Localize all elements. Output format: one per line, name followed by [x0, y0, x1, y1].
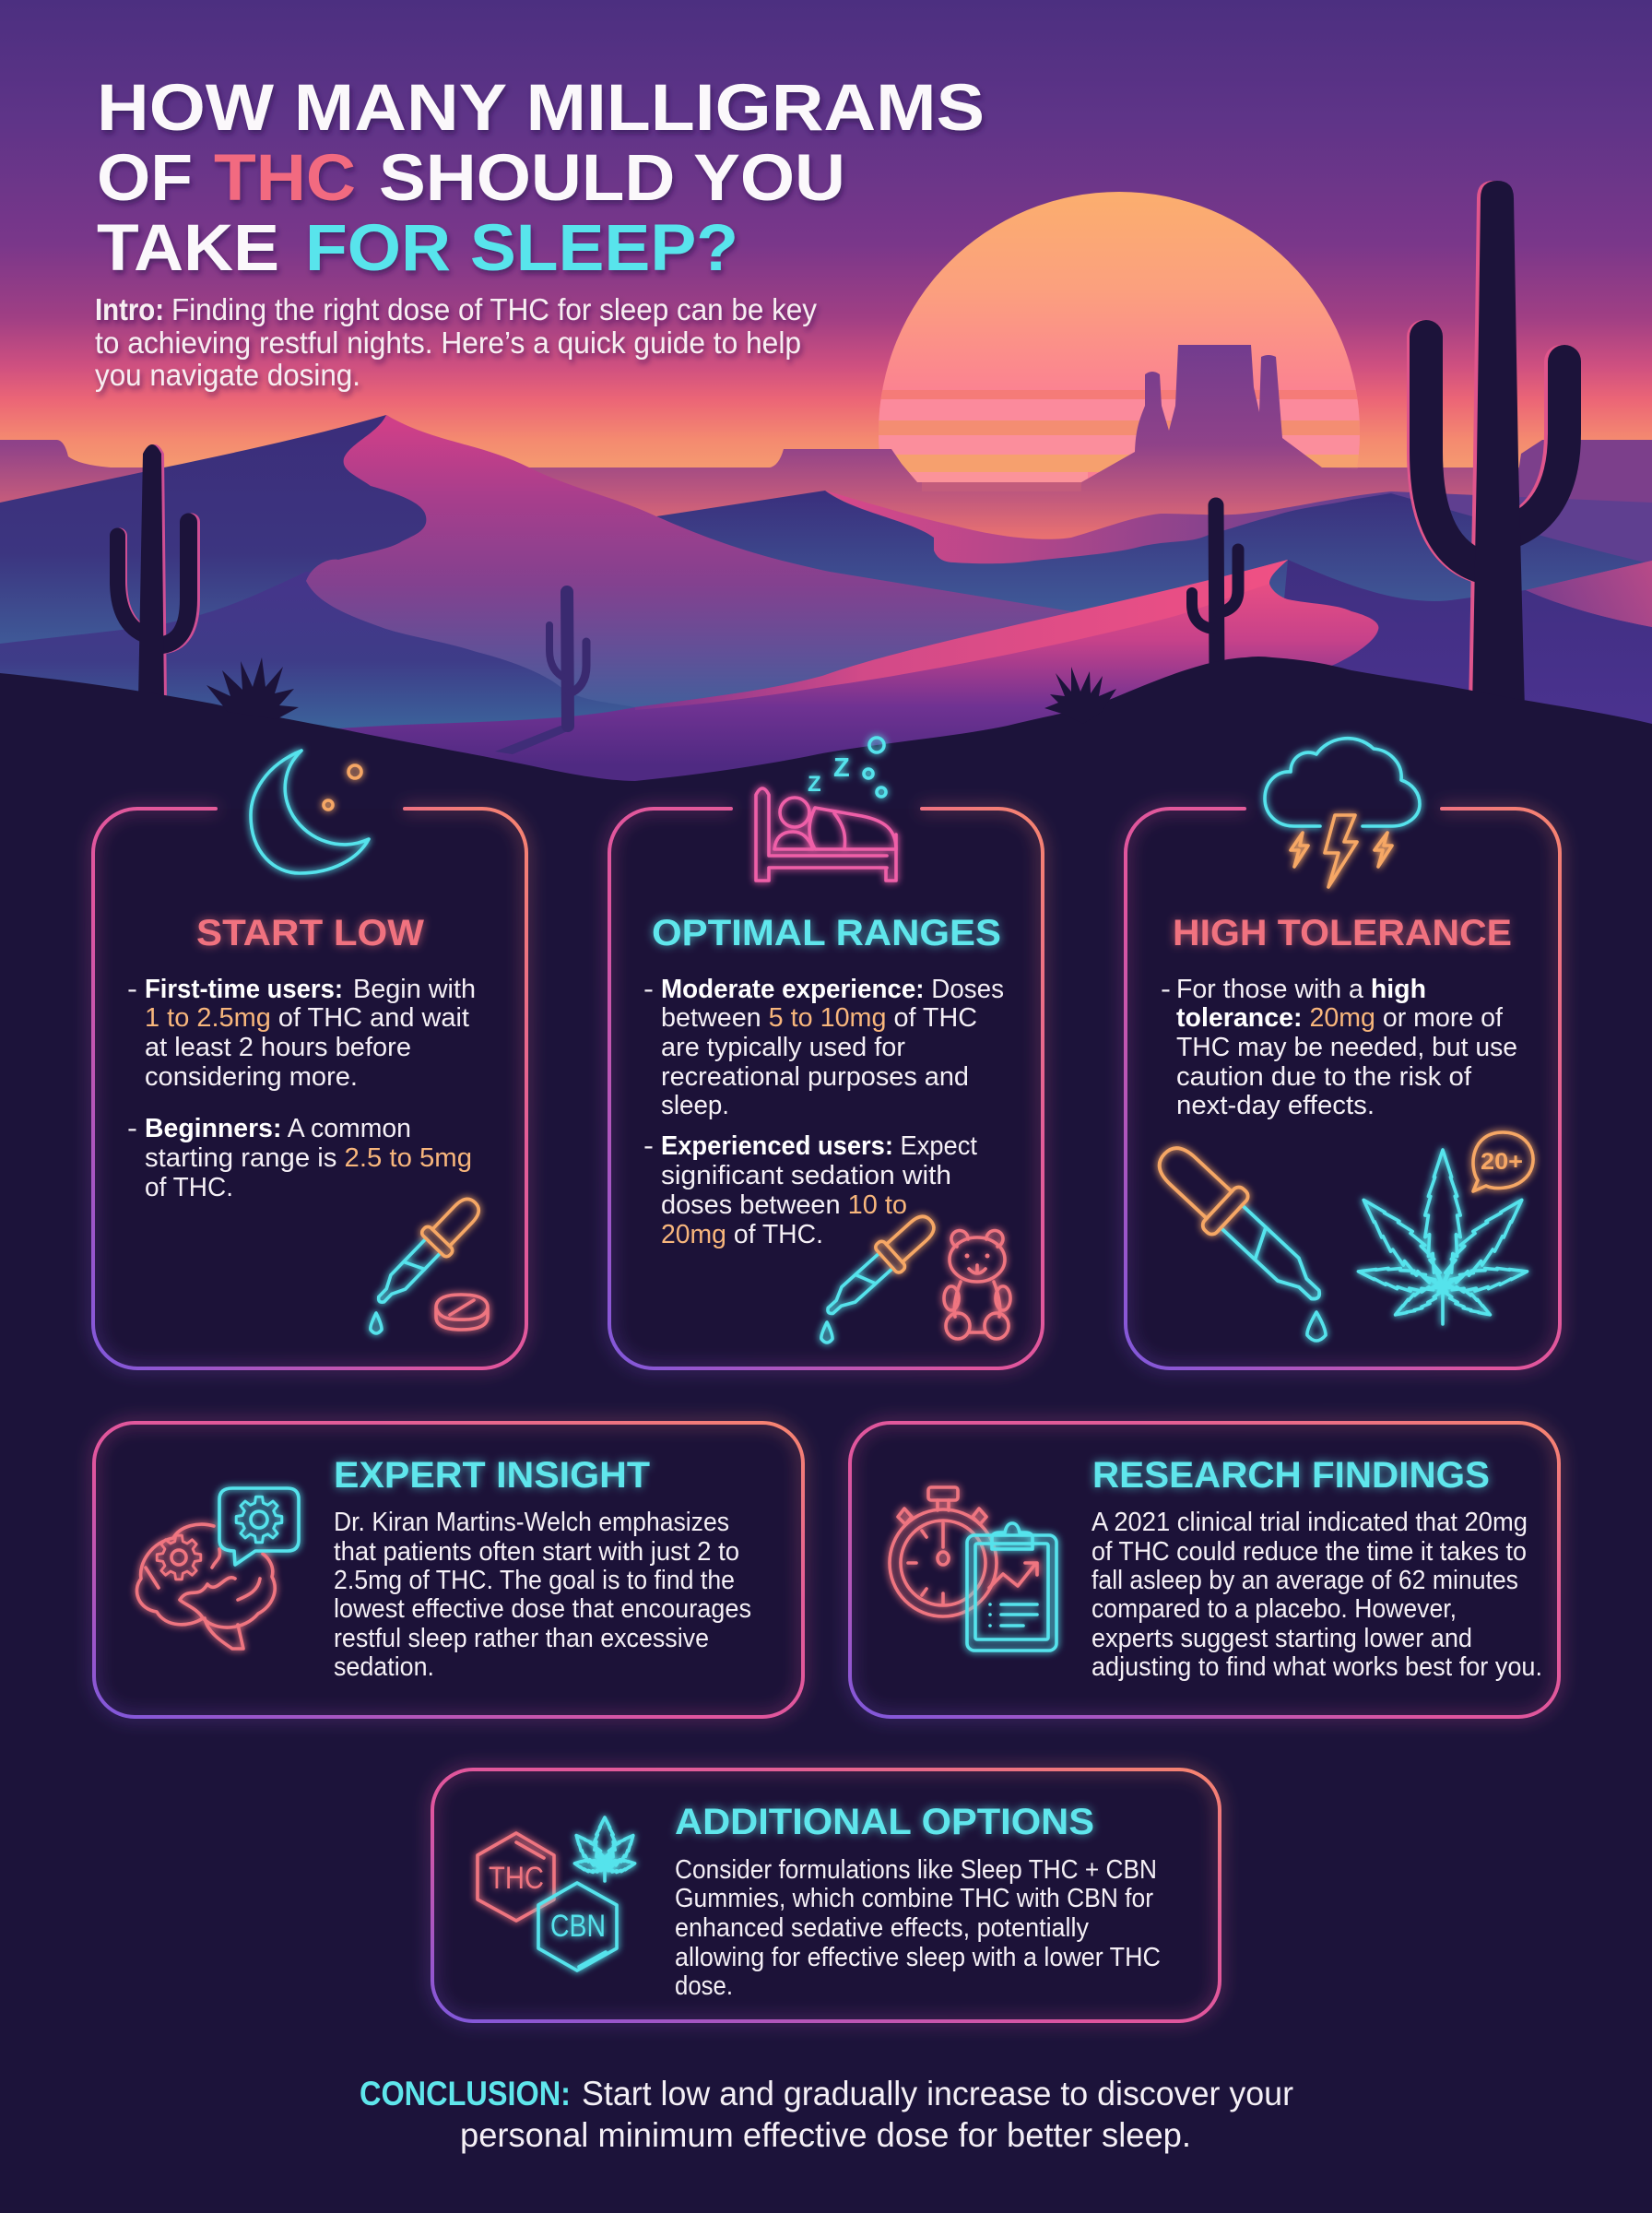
body text: For those with a high — [1176, 975, 1426, 1004]
body text: at least 2 hours before — [145, 1033, 411, 1062]
body text: that patients often start with just 2 to — [334, 1537, 739, 1567]
panel: research findings — [850, 1423, 1559, 1717]
heading: HIGH TOLERANCE — [1173, 913, 1512, 953]
conclusion — [360, 2075, 1293, 2154]
body text — [1092, 1508, 1542, 1682]
intro text: to achieving restful nights. Here’s a quick guide to help — [95, 325, 801, 360]
body text: lowest effective dose that encourages — [334, 1594, 751, 1624]
icon: crescent moon and stars — [251, 751, 369, 873]
card border — [850, 1423, 1559, 1717]
mesa: monument butte — [1081, 345, 1383, 544]
card border — [432, 1769, 1220, 2021]
body text: caution due to the risk of — [1176, 1062, 1472, 1092]
body text: Begin with — [353, 975, 476, 1004]
back dune: magenta wedge — [825, 491, 1652, 590]
body text: Moderate experience: Doses — [661, 975, 1004, 1004]
body text: of THC could reduce the time it takes to — [1092, 1537, 1527, 1567]
body text: starting range is 2.5 to 5mg — [145, 1143, 472, 1173]
body text — [1161, 975, 1517, 1120]
icon: person sleeping in bed: Z — [808, 772, 821, 797]
body text: enhanced sedative effects, potentially — [675, 1913, 1089, 1943]
heading: OPTIMAL RANGES — [652, 913, 1001, 953]
body text: First-time users: — [145, 975, 343, 1004]
body text: doses between 10 to — [661, 1190, 907, 1220]
icon: small cannabis leaf — [571, 1817, 639, 1881]
body text: restful sleep rather than excessive — [334, 1624, 709, 1653]
sun with stripes — [876, 189, 1364, 491]
body text: - — [127, 975, 137, 1004]
card border — [93, 809, 526, 1368]
icon: person sleeping in bed: Z — [833, 753, 850, 783]
cactus: small middle — [495, 592, 586, 754]
body text — [334, 1508, 751, 1682]
icon: clipboard chart — [967, 1523, 1056, 1651]
body text: compared to a placebo. However, — [1092, 1594, 1457, 1624]
right dark dune — [1272, 560, 1652, 728]
body text: - — [643, 975, 654, 1004]
body text — [127, 975, 476, 1202]
icon: brain with gears — [136, 1488, 299, 1649]
icon: THC hexagon: THC — [489, 1861, 544, 1896]
intro text: Intro: — [95, 292, 164, 326]
icon: 20+ speech bubble — [1473, 1132, 1533, 1191]
title — [97, 72, 985, 285]
far right pink dune — [1438, 561, 1652, 636]
icon: CBN hexagon — [538, 1883, 617, 1970]
agave left — [206, 657, 299, 719]
panel: high tolerance — [1126, 739, 1560, 1368]
heading: START LOW — [196, 913, 424, 953]
body text: sleep. — [661, 1091, 729, 1120]
body text: THC may be needed, but use — [1176, 1033, 1517, 1062]
heading: RESEARCH FINDINGS — [1092, 1455, 1490, 1496]
pink dune ridge highlight — [635, 560, 1288, 710]
body text: considering more. — [145, 1062, 358, 1092]
panel: expert insight — [94, 1423, 803, 1717]
body text — [643, 975, 1004, 1249]
icon: storm cloud with bolts — [1265, 739, 1420, 887]
big dune: lit face — [306, 415, 1071, 728]
horizon band — [0, 467, 1652, 744]
title: FOR SLEEP? — [305, 212, 738, 285]
intro text: Finding the right dose of THC for sleep can be key — [171, 292, 817, 326]
body text: - — [643, 1131, 654, 1161]
body text: sedation. — [334, 1652, 434, 1682]
sky background — [0, 0, 1652, 553]
body text: - — [1161, 975, 1171, 1004]
mesa: far right — [1512, 440, 1652, 516]
title: HOW MANY MILLIGRAMS — [97, 72, 985, 145]
body text: of THC. — [145, 1173, 233, 1202]
icon: cannabis leaf — [1352, 1150, 1533, 1324]
panel: optimal ranges — [609, 738, 1043, 1368]
body text: 1 to 2.5mg of THC and wait — [145, 1003, 469, 1033]
panel: additional options — [432, 1769, 1220, 2021]
body text: between 5 to 10mg of THC — [661, 1003, 977, 1033]
card border — [609, 809, 1043, 1368]
ground silhouette — [0, 657, 1652, 2213]
conclusion: Start low and gradually increase to discover your — [582, 2075, 1293, 2112]
cactus: left — [118, 444, 192, 701]
body text: adjusting to find what works best for you. — [1092, 1652, 1542, 1682]
body text: experts suggest starting lower and — [1092, 1624, 1472, 1653]
back dune: blue ridge — [656, 491, 1646, 664]
icon: large dropper — [1145, 1133, 1338, 1341]
body text: significant sedation with — [661, 1161, 951, 1190]
body text: A 2021 clinical trial indicated that 20mg — [1092, 1508, 1528, 1537]
conclusion: CONCLUSION: — [360, 2075, 571, 2112]
body text: Experienced users: Expect — [661, 1131, 977, 1161]
pink lit dune — [645, 560, 1378, 779]
icon: THC hexagon — [478, 1833, 554, 1921]
title: TAKE — [97, 212, 279, 285]
body text: next-day effects. — [1176, 1091, 1375, 1120]
body text: recreational purposes and — [661, 1062, 969, 1092]
icon: dropper and pill — [366, 1189, 489, 1333]
conclusion: personal minimum effective dose for better sleep. — [460, 2116, 1191, 2154]
intro text — [95, 292, 817, 392]
body text: fall asleep by an average of 62 minutes — [1092, 1566, 1518, 1595]
icon: gummy bear — [944, 1231, 1010, 1339]
big dune: shadowed face — [0, 415, 664, 738]
body text: 2.5mg of THC. The goal is to find the — [334, 1566, 735, 1595]
icon: 20+ speech bubble: 20+ — [1481, 1149, 1523, 1175]
body text: Gummies, which combine THC with CBN for — [675, 1884, 1153, 1913]
agave right — [1044, 667, 1116, 724]
mesa: middle — [770, 449, 922, 516]
body text: are typically used for — [661, 1033, 905, 1062]
body text: Beginners: A common — [145, 1114, 411, 1143]
big dune: lower shadow dune — [0, 572, 830, 738]
title: THC — [214, 142, 356, 215]
body text: allowing for effective sleep with a lower THC — [675, 1943, 1161, 1972]
cactus: big right — [1423, 181, 1564, 710]
body text: tolerance: 20mg or more of — [1176, 1003, 1504, 1033]
title: SHOULD YOU — [379, 142, 845, 215]
heading: EXPERT INSIGHT — [334, 1455, 650, 1496]
heading: ADDITIONAL OPTIONS — [675, 1802, 1094, 1842]
icon: person sleeping in bed — [756, 738, 896, 881]
body text: - — [127, 1114, 137, 1143]
panel: start low — [93, 751, 526, 1368]
foreground purple dune — [338, 673, 1106, 788]
right pink dune edge — [1526, 561, 1652, 627]
card border — [1126, 809, 1560, 1368]
icon: CBN hexagon: CBN — [550, 1909, 606, 1944]
icon: stopwatch — [890, 1487, 997, 1616]
body text: Consider formulations like Sleep THC + CBN — [675, 1855, 1157, 1885]
card border — [94, 1423, 803, 1717]
body text — [675, 1855, 1161, 2001]
body text: 20mg of THC. — [661, 1220, 823, 1249]
title: OF — [97, 142, 193, 215]
cactus: right small — [1192, 505, 1238, 673]
body text: Dr. Kiran Martins-Welch emphasizes — [334, 1508, 729, 1537]
icon: dropper — [816, 1207, 943, 1343]
intro text: you navigate dosing. — [95, 358, 360, 392]
mesa: far left — [0, 440, 148, 516]
body text: dose. — [675, 1971, 733, 2001]
